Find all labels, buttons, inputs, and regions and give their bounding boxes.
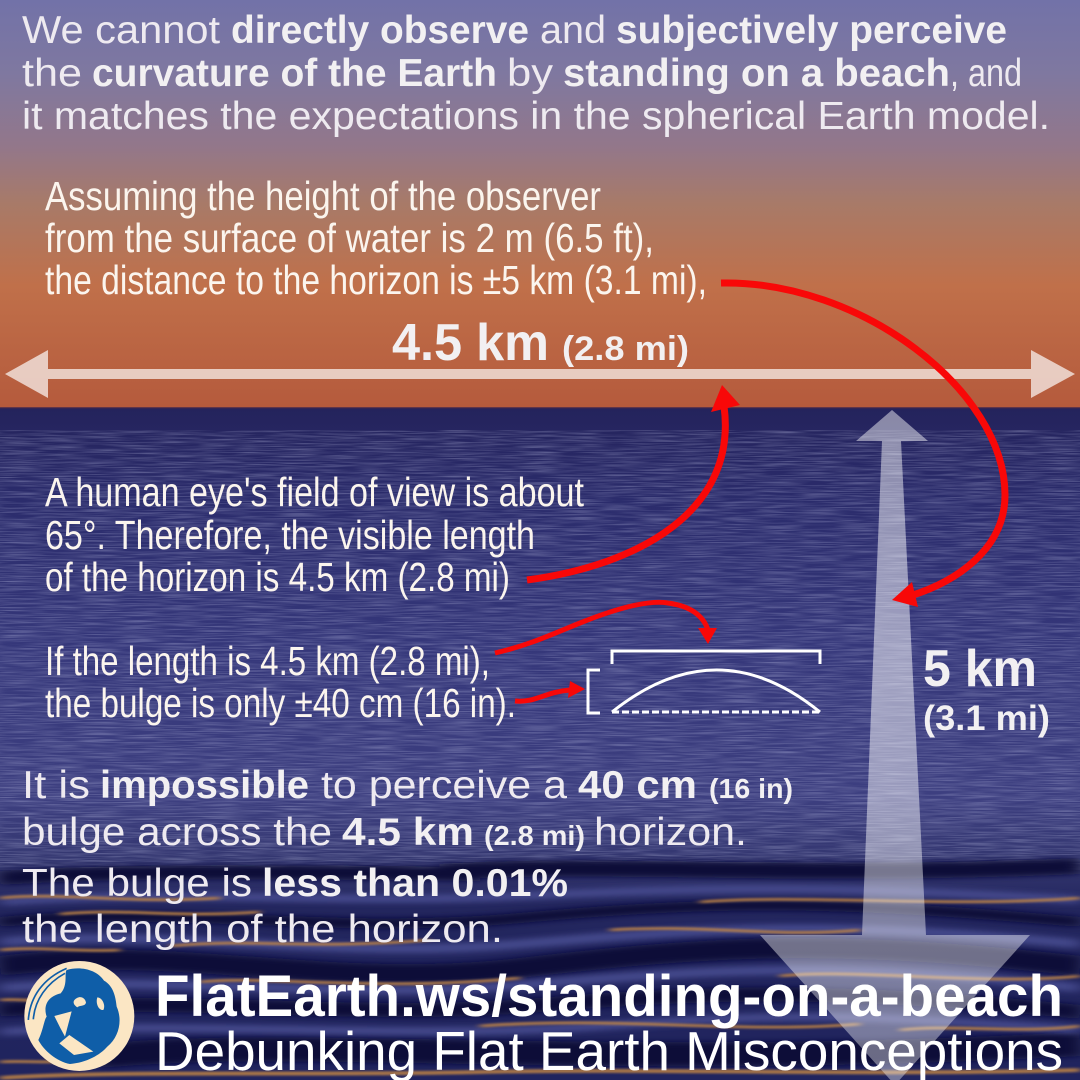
conclusion text: impossible — [100, 764, 309, 807]
conclusion text: the length of the horizon. — [22, 908, 503, 951]
conclusion text: 40 cm — [578, 764, 697, 807]
label: 4.5 km: (2.8 mi) — [562, 330, 689, 368]
footer: site url: FlatEarth.ws/standing-on-a-beach — [155, 964, 1063, 1029]
label: 5 km: (3.1 mi) — [923, 699, 1050, 738]
text block: field of view: 65°. Therefore, the visible length — [45, 512, 535, 558]
heading text: standing on a beach — [563, 52, 950, 95]
background: sea — [0, 408, 1080, 1080]
heading text: directly observe — [231, 9, 529, 52]
red arrow: length to top bracket — [495, 602, 717, 653]
conclusion text: horizon. — [594, 811, 747, 854]
heading text — [22, 9, 1050, 138]
text block: bulge size: the bulge is only ±40 cm (16 in). — [45, 680, 516, 726]
horizon line — [0, 407, 1080, 409]
label: 4.5 km — [392, 314, 689, 372]
text block: field of view: of the horizon is 4.5 km (2.8 mi) — [45, 554, 510, 600]
text block: bulge size: If the length is 4.5 km (2.8 mi), — [45, 638, 490, 684]
conclusion text — [22, 764, 793, 951]
conclusion text: 4.5 km — [342, 811, 474, 854]
text block: observer height and horizon distance: the distance to the horizon is ±5 km (3.1 mi), — [45, 257, 707, 303]
conclusion text: bulge across the — [22, 811, 332, 854]
heading text: , and — [950, 52, 1022, 95]
label: 4.5 km: 4.5 km — [392, 314, 549, 372]
text block: field of view: A human eye's field of view is about — [45, 469, 584, 515]
conclusion text: (16 in) — [709, 773, 793, 804]
horizontal arrow: visible horizon length — [5, 350, 1075, 398]
text block: observer height and horizon distance — [45, 173, 707, 303]
text block: observer height and horizon distance: from the surface of water is 2 m (6.5 ft), — [45, 215, 654, 261]
red arrow: field of view to horizontal arrow — [527, 385, 740, 580]
heading text: the — [22, 52, 82, 95]
heading text: curvature of the Earth — [92, 52, 497, 95]
background: sunset sky — [0, 0, 1080, 408]
heading text: and — [540, 9, 606, 52]
heading text: it matches the expectations in the spherical Earth model. — [22, 95, 1050, 138]
conclusion text: It is — [22, 764, 90, 807]
label: 5 km — [923, 640, 1050, 738]
heading text: by — [507, 52, 554, 95]
label: 5 km: 5 km — [923, 640, 1037, 698]
conclusion text: less than 0.01% — [262, 862, 568, 905]
red arrow: horizon distance to vertical arrow — [721, 283, 1005, 607]
heading text: subjectively perceive — [616, 9, 1007, 52]
icon: flat earth logo — [24, 961, 134, 1071]
conclusion text: The bulge is — [22, 862, 252, 905]
text block: bulge size — [45, 638, 516, 726]
conclusion text: to perceive a — [321, 764, 567, 807]
diagram: bulge over chord — [588, 651, 820, 713]
text block: observer height and horizon distance: Assuming the height of the observer — [45, 173, 601, 219]
conclusion text: (2.8 mi) — [484, 820, 585, 851]
vertical arrow: distance to horizon — [760, 410, 1030, 1080]
heading text: We cannot — [22, 9, 220, 52]
text block: field of view — [45, 469, 584, 600]
red arrow: bulge to side bracket — [515, 681, 585, 701]
